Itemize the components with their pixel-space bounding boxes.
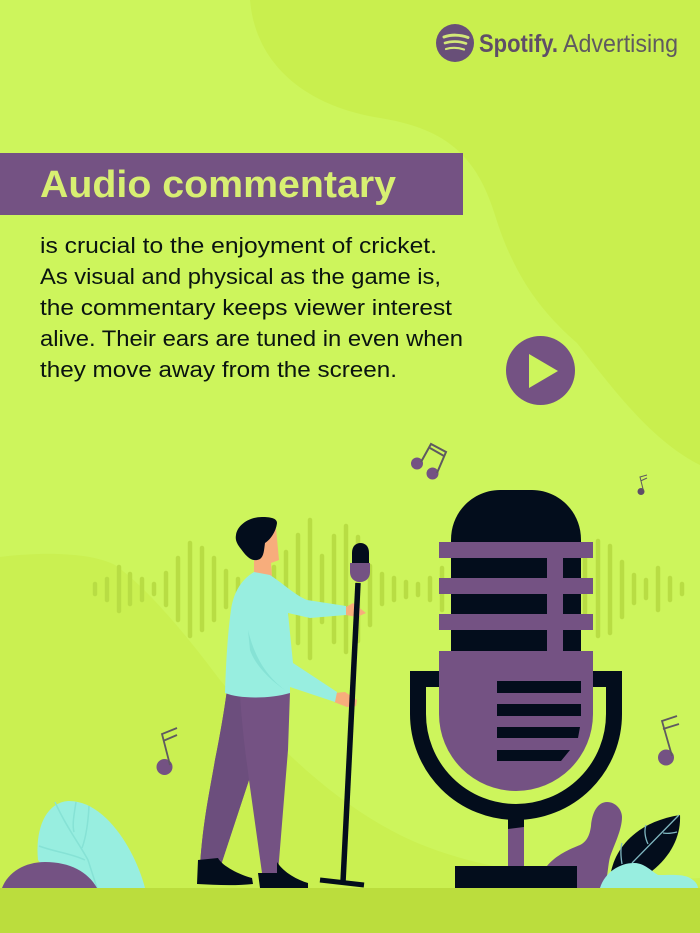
hand low (334, 692, 357, 707)
mic body (439, 651, 593, 791)
shoes (197, 858, 253, 885)
stem (508, 820, 524, 866)
icon: Spotify circle (436, 24, 474, 62)
logo: Spotify Advertising (436, 24, 678, 62)
plant: left (2, 801, 145, 888)
body text (40, 233, 463, 382)
mic base (455, 866, 577, 888)
icon: play button (506, 336, 575, 405)
purple blob (547, 802, 622, 888)
big microphone (418, 490, 614, 888)
icon: right music note (658, 716, 679, 766)
icon: double music note (411, 444, 446, 480)
shirt fold (248, 630, 285, 690)
trousers (200, 690, 290, 873)
hand on mic stand (346, 603, 366, 617)
cyan mound (600, 863, 698, 888)
body text: As visual and physical as the game is, (40, 264, 441, 289)
neck and face (254, 528, 279, 577)
ground (0, 888, 700, 933)
body text: the commentary keeps viewer interest (40, 295, 453, 320)
mic head (451, 490, 581, 651)
mic stand (320, 543, 370, 885)
dark leaf (610, 815, 680, 878)
icon: small music note (638, 475, 647, 495)
wordmark: Advertising (563, 30, 678, 58)
leaf veins (39, 802, 97, 888)
plant: right (547, 802, 698, 888)
person (197, 517, 370, 888)
purple mound (2, 862, 97, 888)
waveform (95, 520, 682, 658)
shirt (225, 572, 346, 702)
yoke (418, 679, 614, 812)
body text: alive. Their ears are tuned in even when (40, 326, 463, 351)
body text: is crucial to the enjoyment of cricket. (40, 233, 437, 258)
leaf veins (621, 815, 679, 864)
grille bars (439, 542, 593, 651)
wordmark (479, 30, 678, 58)
back leg shade (200, 690, 249, 868)
heading banner (0, 153, 463, 215)
body text: they move away from the screen. (40, 357, 397, 382)
icon: left music note (156, 728, 177, 775)
mic slots (497, 681, 581, 761)
hair (236, 517, 277, 560)
cyan leaf (37, 801, 145, 888)
heading banner: Audio commentary (40, 164, 396, 206)
wordmark: Spotify. (479, 30, 558, 58)
